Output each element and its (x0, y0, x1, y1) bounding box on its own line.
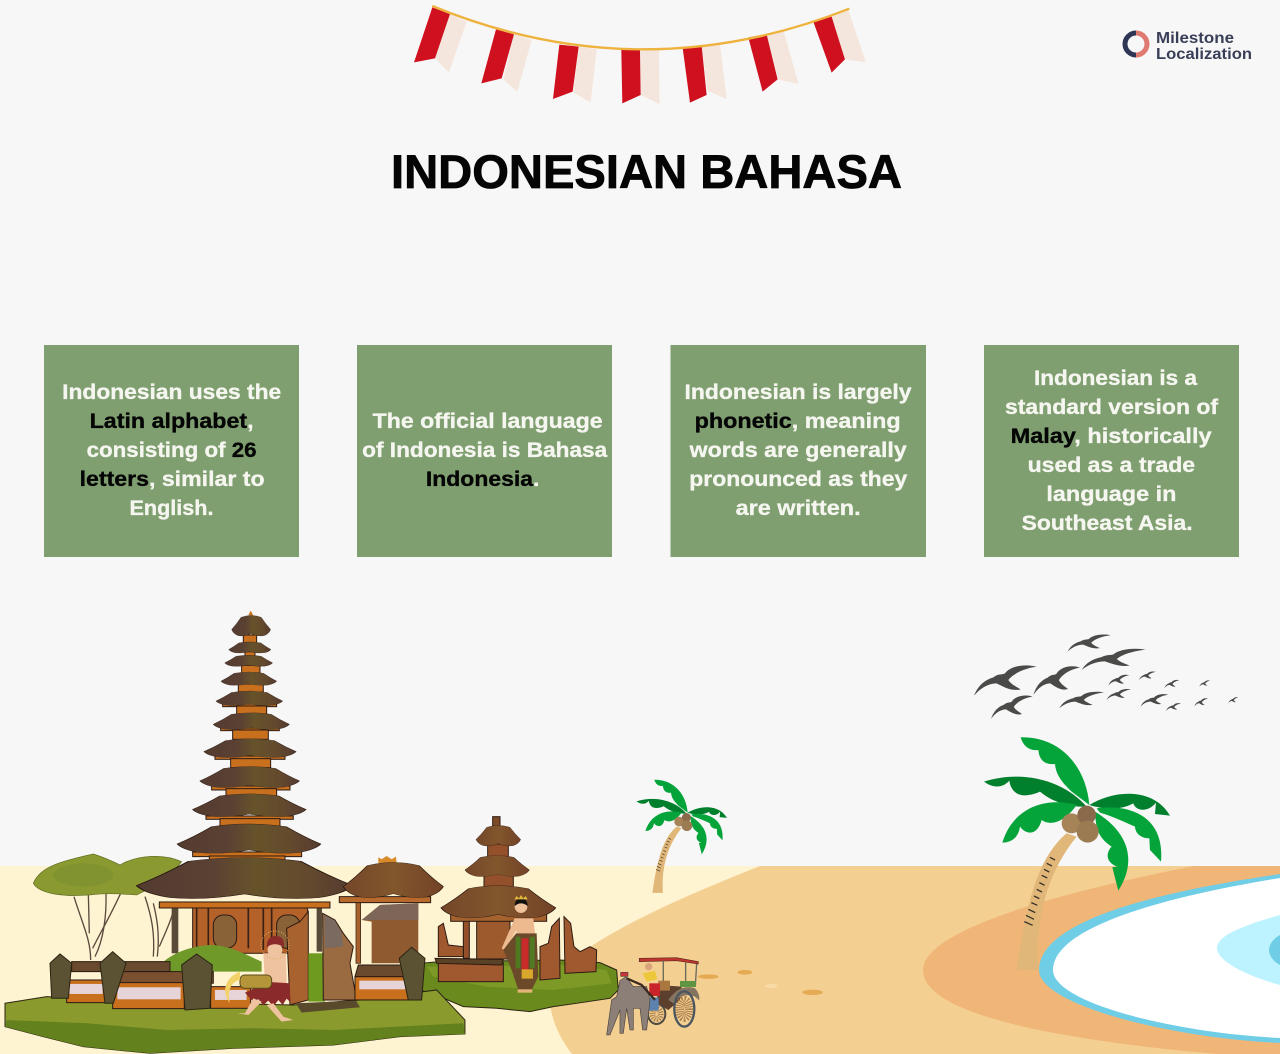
panel: alphabet (44, 345, 299, 557)
title: INDONESIAN BAHASA (391, 145, 902, 198)
steps (296, 1001, 360, 1013)
main temple island (5, 611, 465, 1053)
temple wall (67, 962, 410, 1009)
temple hall (137, 858, 353, 953)
panel text: used as a trade (1028, 453, 1195, 477)
panel text: Malay , historically (1011, 424, 1212, 448)
panel text: Indonesian is largely (684, 380, 912, 404)
pavilion (339, 856, 443, 963)
logo wordmark: Localization (1156, 46, 1252, 63)
panel text: English. (130, 496, 214, 520)
cart wheels (648, 991, 694, 1027)
panel text: words are generally (689, 438, 907, 462)
panel text: phonetic , meaning (695, 409, 901, 433)
water edge (1039, 874, 1280, 1043)
darker sand around water (923, 866, 1280, 1054)
beach (550, 866, 1280, 1054)
horse cart (607, 958, 823, 1035)
shallow water (1217, 915, 1280, 985)
sand patches (698, 970, 823, 995)
ground: pale sand (0, 866, 1280, 1054)
golden sand (550, 866, 1280, 1054)
panel text: Latin alphabet , (90, 409, 254, 433)
panel text (62, 380, 281, 520)
panel: malay (984, 345, 1239, 557)
foam (1053, 878, 1280, 1038)
panel text (362, 409, 608, 491)
panel: phonetic (670, 345, 926, 557)
small pagoda (441, 817, 556, 959)
panel text: are written. (736, 496, 861, 520)
panel text: Indonesian uses the (62, 380, 281, 404)
temple wall and gates (435, 917, 597, 982)
panel text: consisting of 26 (87, 438, 257, 462)
panel: official language (357, 345, 612, 557)
woman dancer (502, 895, 538, 993)
cart body (657, 985, 682, 1010)
logo ring (1125, 33, 1147, 55)
blue bag (647, 997, 659, 1011)
panel text: Southeast Asia. (1022, 511, 1193, 535)
wall posts (50, 947, 425, 1010)
small temple island (420, 817, 618, 1012)
large palm tree (984, 737, 1170, 970)
panel text (1005, 366, 1219, 535)
trees (33, 854, 182, 960)
panel text: language in (1046, 482, 1176, 506)
logo wordmark: Milestone (1156, 30, 1234, 47)
horse (607, 972, 655, 1035)
logo (1125, 30, 1252, 63)
panel text: The official language (373, 409, 603, 433)
panel text (684, 380, 912, 520)
island ground (5, 990, 465, 1053)
right gate (323, 913, 357, 1000)
panel text: pronounced as they (689, 467, 907, 491)
panel text: letters, similar to (80, 467, 265, 491)
deep water (1269, 935, 1280, 965)
bunting (414, 6, 866, 104)
bush (157, 945, 262, 972)
green strip (308, 953, 325, 1002)
panel text: Indonesian is a (1034, 366, 1198, 390)
drummer figure (225, 931, 293, 1022)
pagoda (177, 611, 321, 863)
panel text: of Indonesia is Bahasa (362, 438, 608, 462)
left gate (287, 912, 308, 1005)
cart driver (643, 963, 657, 982)
small palm tree (637, 780, 727, 893)
panel text: standard version of (1005, 395, 1219, 419)
birds flock (974, 634, 1238, 719)
cart canopy (639, 958, 698, 987)
panel text: Indonesia . (426, 467, 539, 491)
island ground (420, 960, 618, 1012)
